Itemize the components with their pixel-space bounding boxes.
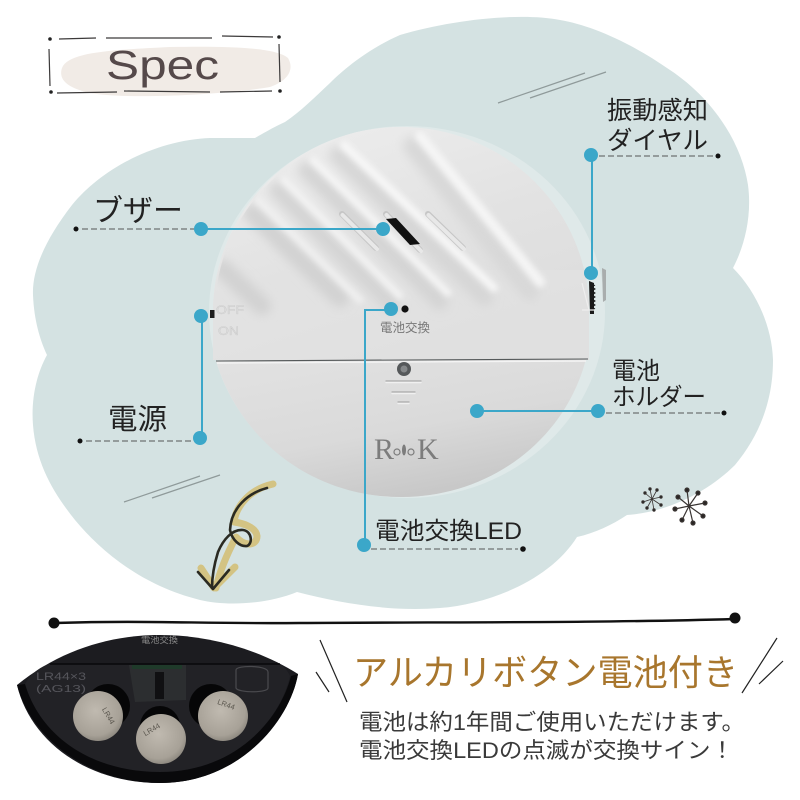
callout: 電池交換LED (357, 302, 526, 552)
callout: 電池交換LED: 電池交換LED (375, 518, 522, 545)
text block: battery note: 電池交換LEDの点滅が交換サイン！ (359, 738, 734, 763)
switch labels: OFF (216, 303, 244, 317)
LED indicator: 電池交換 (380, 321, 430, 335)
callout: ブザー (74, 195, 390, 236)
coin cells: LR44 (100, 706, 117, 726)
photo: battery holder with three button cells (17, 635, 298, 783)
photo: battery holder with three button cells: 電池交換 (141, 635, 179, 645)
callout: 電池ホルダー: 電池 (612, 358, 660, 385)
callout: ブザー: ブザー (93, 195, 183, 228)
text block: battery note: 電池は約1年間ご使用いただけます。 (359, 710, 745, 735)
lower battery cover (216, 359, 586, 497)
heading: Spec (48, 35, 291, 96)
LED indicator (380, 305, 430, 335)
screw and ground marks (386, 362, 421, 404)
logo R K: R (374, 433, 394, 466)
heading: アルカリボタン電池付き (316, 638, 783, 702)
logo R K: K (417, 433, 439, 466)
callout: 振動感知ダイヤル: 振動感知 (607, 97, 708, 125)
icon: curly arrow (198, 484, 273, 589)
callout: 振動感知ダイヤル (584, 97, 720, 280)
coin cells: LR44 (216, 697, 236, 712)
callout: 電池ホルダー: ホルダー (612, 384, 706, 411)
icon: starburst decoration (642, 488, 707, 525)
callout: 電源 (78, 309, 208, 445)
coin cells (73, 691, 248, 764)
photo: battery holder with three button cells: LR44×3 (36, 671, 86, 683)
coin cells: LR44 (142, 721, 162, 738)
vibration dial (582, 268, 606, 314)
callout: 電池ホルダー (470, 358, 726, 418)
recessed slots (86, 684, 233, 746)
device: round vibration alarm (209, 125, 606, 498)
logo R K (374, 433, 439, 466)
upper housing with diagonal ridges (210, 125, 595, 365)
callout: 振動感知ダイヤル: ダイヤル (607, 127, 708, 155)
switch labels: ON (218, 324, 239, 338)
text block: battery note (359, 710, 745, 763)
switch labels (210, 303, 244, 338)
heading: アルカリボタン電池付き: アルカリボタン電池付き (353, 652, 738, 693)
background blob (33, 17, 773, 609)
speaker slots (342, 214, 464, 251)
photo: battery holder with three button cells: (AG13) (36, 684, 86, 695)
callout: 電源: 電源 (108, 403, 167, 436)
heading: Spec: Spec (106, 42, 219, 88)
section divider line (48, 612, 740, 628)
